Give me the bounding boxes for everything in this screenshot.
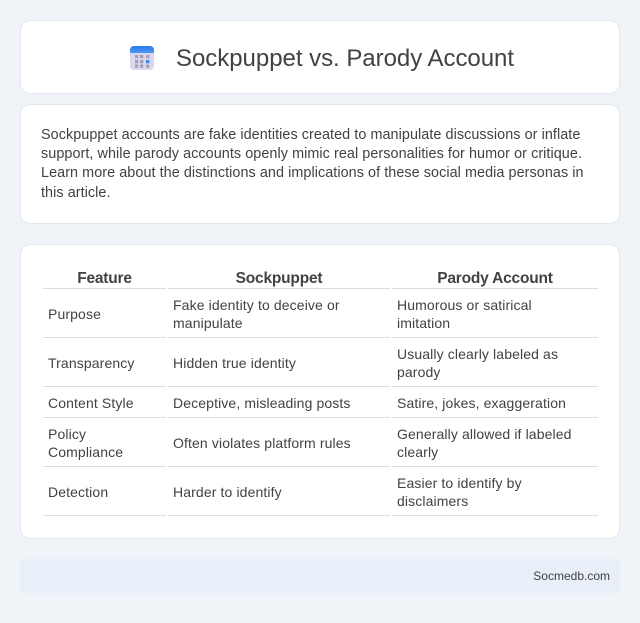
comparison table: Easier to identify by (397, 475, 522, 491)
comparison table: Compliance (48, 444, 123, 460)
footer bar (20, 559, 620, 593)
row: Policy Compliance: Policy (48, 426, 86, 442)
row: Transparency: Transparency (48, 355, 135, 371)
comparison table: parody (397, 364, 441, 380)
intro text: Learn more about the distinctions and implications of these social media personas in (41, 165, 584, 181)
intro text: this article. (41, 185, 111, 201)
comparison table: Hidden true identity (173, 355, 296, 371)
comparison table: manipulate (173, 315, 243, 331)
intro text: Sockpuppet accounts are fake identities created to manipulate discussions or inflate (41, 127, 580, 143)
panel: title card (20, 20, 620, 94)
row: Purpose: Purpose (48, 306, 101, 322)
panel: comparison table card (20, 244, 620, 539)
panel: intro text card (20, 104, 620, 224)
comparison table: Usually clearly labeled as (397, 346, 558, 362)
comparison table: Deceptive, misleading posts (173, 395, 351, 411)
comparison table: clearly (397, 444, 438, 460)
comparison table: Fake identity to deceive or (173, 297, 340, 313)
comparison table: Generally allowed if labeled (397, 426, 572, 442)
comparison table: Humorous or satirical (397, 297, 532, 313)
header: Sockpuppet: Sockpuppet (236, 270, 322, 287)
row: Content Style: Content Style (48, 395, 134, 411)
footer text: Socmedb.com (533, 569, 610, 583)
intro text (41, 127, 584, 201)
comparison table: Often violates platform rules (173, 435, 351, 451)
comparison table: Satire, jokes, exaggeration (397, 395, 566, 411)
header: Feature: Feature (77, 270, 132, 287)
comparison table: Harder to identify (173, 484, 282, 500)
intro text: support, while parody accounts openly mimic real personalities for humor or critique. (41, 146, 582, 162)
row: Detection: Detection (48, 484, 108, 500)
title: Sockpuppet vs. Parody Account (176, 45, 514, 72)
header: Parody Account: Parody Account (437, 270, 553, 287)
comparison table (43, 270, 598, 516)
comparison table: disclaimers (397, 493, 468, 509)
comparison table: imitation (397, 315, 450, 331)
icon: calendar (130, 46, 154, 70)
